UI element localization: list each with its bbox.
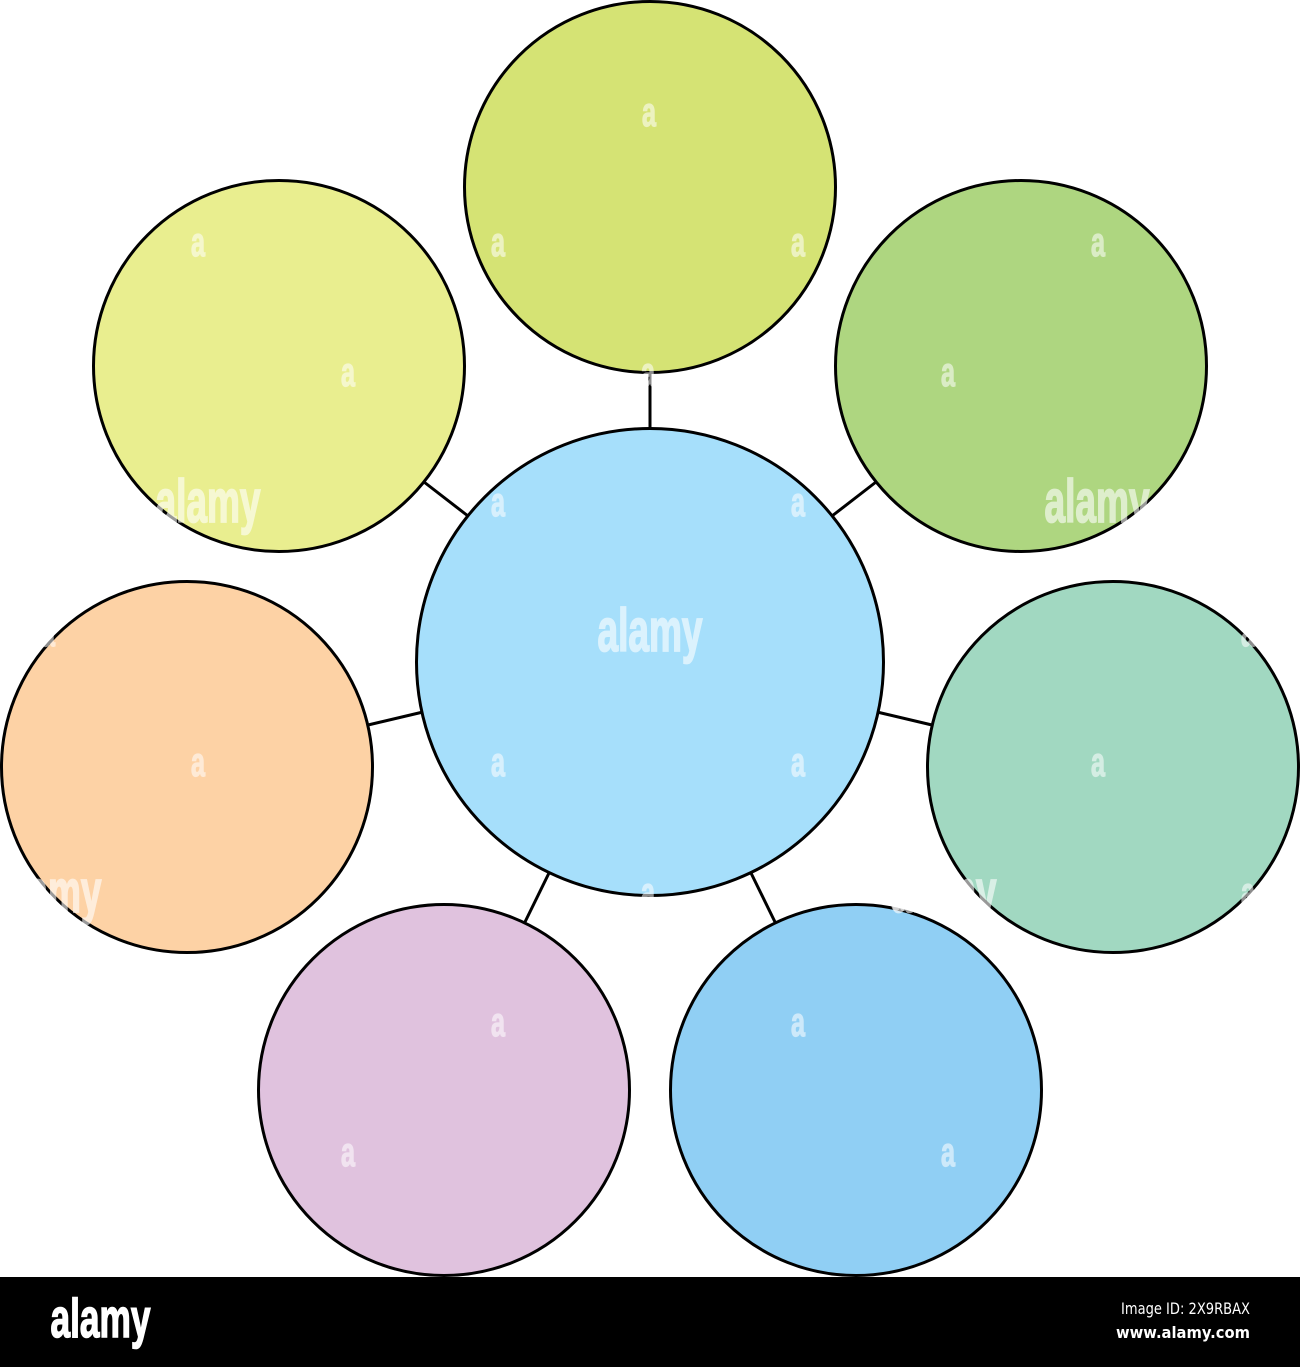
watermark marks: a: [491, 219, 506, 265]
connector lines: [368, 372, 932, 922]
watermark marks: [41, 89, 1256, 1175]
watermark marks: a: [791, 219, 806, 265]
circle: left: [2, 582, 372, 952]
watermark marks: a: [791, 479, 806, 525]
circle: upper right: [836, 180, 1206, 552]
watermark marks: a: [191, 739, 206, 785]
watermark words: alamy: [892, 858, 997, 925]
watermark marks: a: [341, 349, 356, 395]
circle: center hub: [416, 428, 884, 896]
footer image id: Image ID: 2X9RBAX: [1121, 1299, 1250, 1318]
watermark marks: a: [1091, 219, 1106, 265]
watermark words: alamy: [1044, 468, 1150, 535]
watermark marks: a: [491, 479, 506, 525]
watermark marks: a: [341, 1129, 356, 1175]
watermark marks: a: [491, 739, 506, 785]
footer logo: alamy: [50, 1287, 151, 1349]
watermark marks: a: [41, 609, 56, 655]
watermark marks: a: [791, 999, 806, 1045]
watermark marks: a: [641, 869, 656, 915]
watermark marks: a: [642, 89, 657, 135]
footer bar: [0, 1277, 1300, 1367]
watermark words: alamy: [0, 858, 102, 925]
watermark marks: a: [1241, 869, 1256, 915]
watermark marks: a: [891, 873, 906, 919]
watermark marks: a: [641, 349, 656, 395]
circle: upper left: [94, 180, 464, 552]
watermark words: alamy: [598, 597, 703, 664]
watermark marks: a: [491, 999, 506, 1045]
watermark marks: a: [941, 1129, 956, 1175]
circle: lower left: [258, 904, 630, 1276]
watermark marks: a: [1091, 739, 1106, 785]
watermark marks: a: [941, 349, 956, 395]
circle: top: [464, 2, 836, 372]
footer url: www.alamy.com: [1116, 1323, 1250, 1342]
watermark marks: a: [191, 219, 206, 265]
watermark words: [0, 468, 1150, 925]
circle: lower right: [670, 904, 1042, 1276]
watermark words: alamy: [156, 468, 261, 535]
watermark marks: a: [1241, 609, 1256, 655]
circle: right: [928, 582, 1298, 952]
watermark marks: a: [791, 739, 806, 785]
